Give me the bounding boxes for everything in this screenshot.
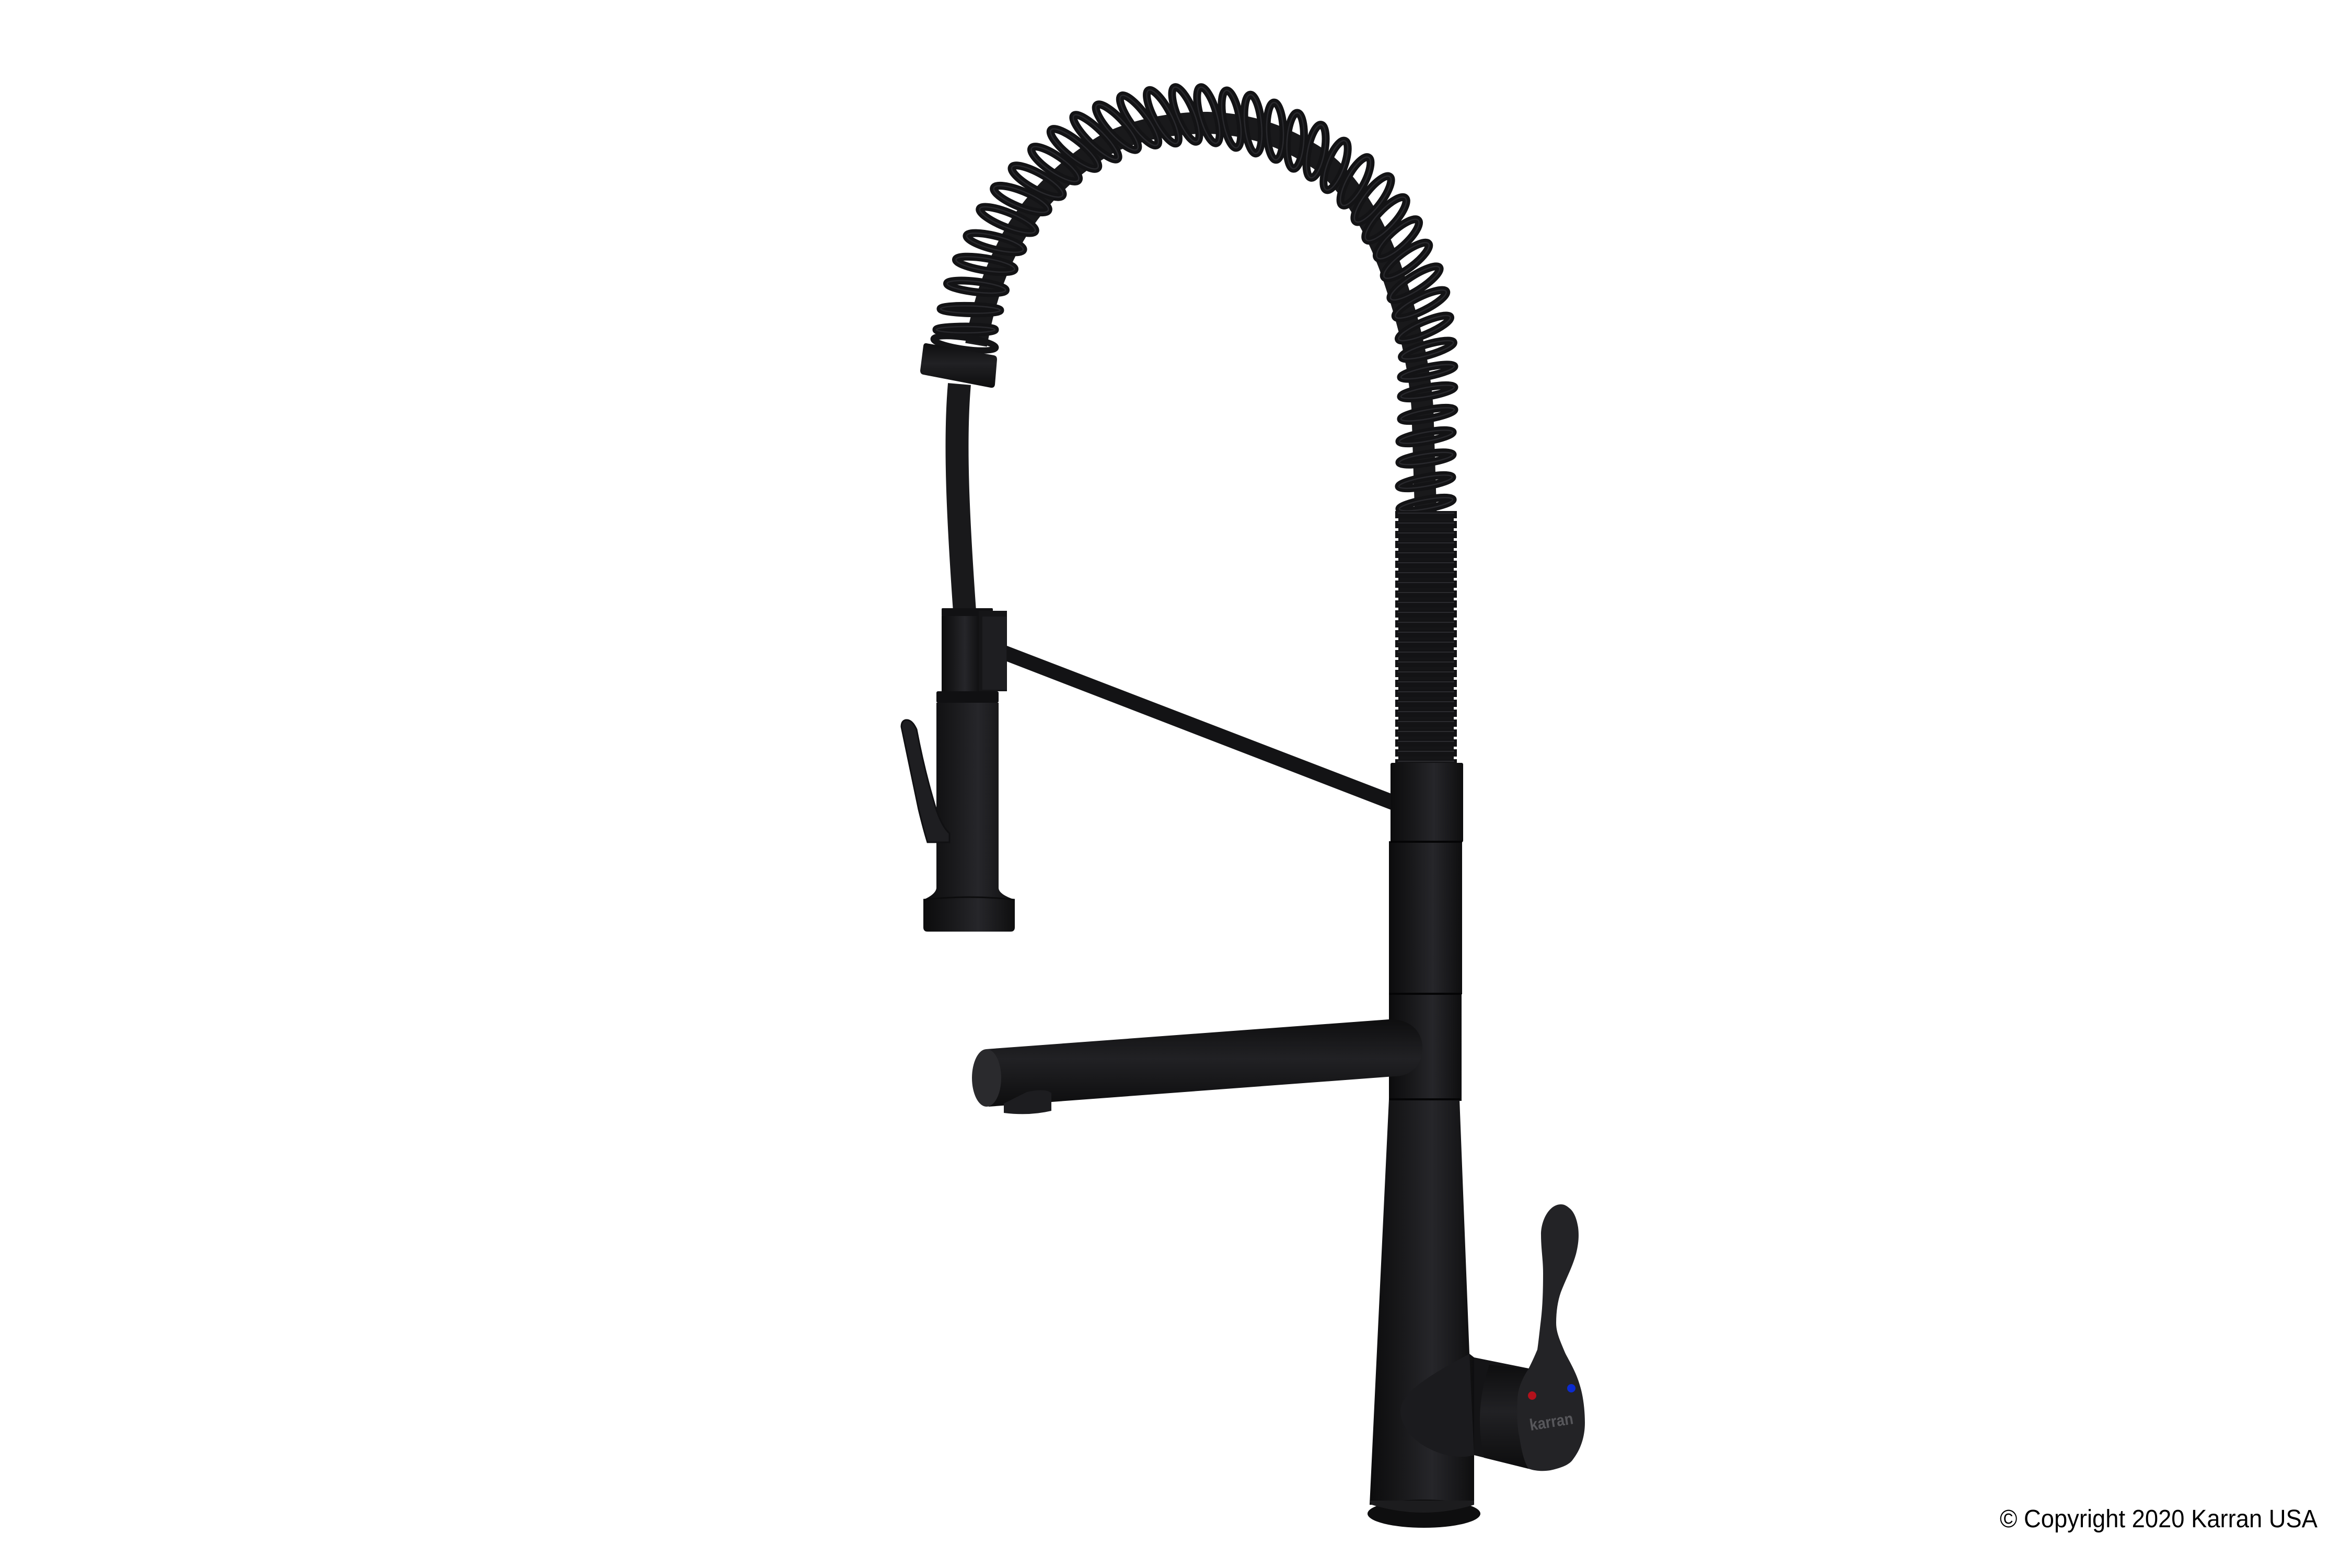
spray head	[901, 608, 1015, 932]
swivel section	[1389, 993, 1462, 1101]
body joint lines	[1389, 842, 1462, 1099]
spring coil highlights	[936, 84, 1455, 514]
spring collar	[920, 343, 997, 388]
flexible hose inside spring	[976, 123, 1426, 522]
handle logo: karran	[1528, 1409, 1574, 1434]
red hot indicator	[1528, 1391, 1536, 1400]
spray collar	[936, 691, 999, 703]
spray body	[923, 703, 1015, 932]
support bar	[1007, 646, 1397, 810]
handle cylinder	[1480, 1365, 1531, 1469]
spring end ring	[933, 333, 997, 353]
body section	[1389, 841, 1462, 994]
upper body sleeve	[1391, 763, 1463, 842]
spout	[972, 1019, 1422, 1114]
spray upper cylinder	[942, 616, 980, 692]
blue cold indicator	[1567, 1384, 1575, 1392]
tight ribbed spring section	[1398, 511, 1454, 764]
copyright notice: © Copyright 2020 Karran USA	[2000, 1505, 2318, 1533]
lower hose	[957, 384, 965, 611]
lower tapered body	[1370, 1099, 1474, 1505]
handle hub	[1474, 1357, 1531, 1469]
spray trigger	[901, 720, 949, 842]
base ring	[1368, 1500, 1480, 1528]
handle neck	[1400, 1354, 1474, 1457]
faucet	[901, 84, 1585, 1528]
spring coils	[936, 84, 1455, 514]
handle lever	[1517, 1204, 1585, 1471]
aerator	[1004, 1090, 1051, 1114]
spout end cap	[972, 1049, 1001, 1107]
spray head rim	[923, 897, 1015, 900]
swivel clip	[979, 611, 1007, 691]
spout tube	[986, 1019, 1422, 1107]
spray cap	[942, 608, 993, 617]
base ring top surface	[1370, 1501, 1474, 1513]
